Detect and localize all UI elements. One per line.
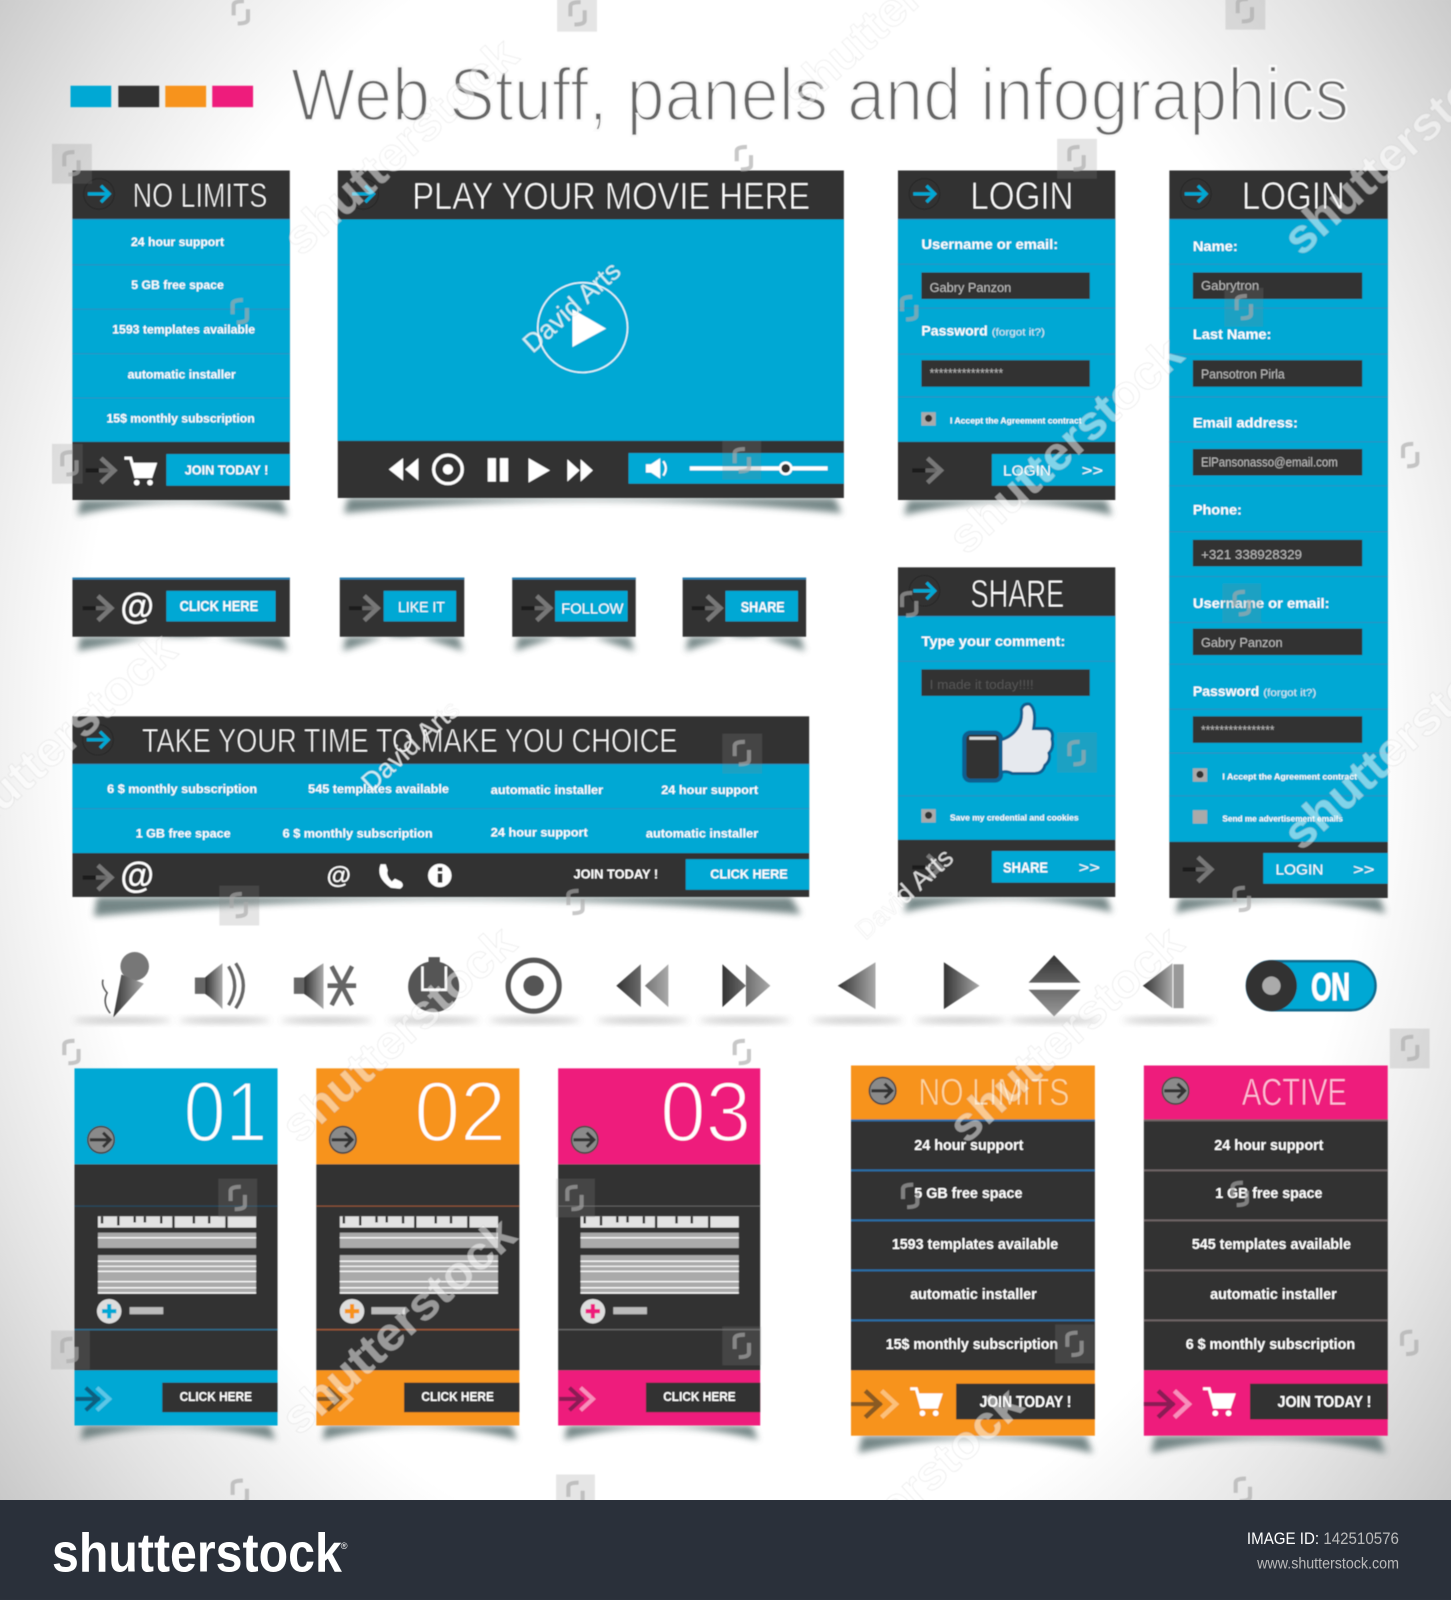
panel: take your time: 6 $ monthly subscription [283, 827, 433, 841]
panel: take your time: 1 GB free space [136, 827, 231, 841]
panel: orange no limits: 5 GB free space [914, 1186, 1022, 1202]
panel: share: I made it today!!!! [930, 677, 1034, 692]
footer bar: ® [341, 1541, 348, 1551]
icon: speaker [195, 963, 243, 1009]
icon row [73, 952, 1375, 1022]
panel: long login form: +321 338928329 [1201, 547, 1302, 562]
heading: NO LIMITS [133, 177, 267, 215]
panel: long login form: **************** [1201, 723, 1274, 738]
panel: long login form: Gabrytron [1201, 278, 1259, 293]
panel: take your time: 24 hour support [661, 783, 758, 797]
toggle: on [1246, 960, 1375, 1011]
panel: take your time: 6 $ monthly subscription [107, 782, 257, 796]
panel: no limits: 5 GB free space [131, 278, 224, 292]
watermarks: shutterstock [273, 27, 528, 265]
text placeholder [581, 1216, 739, 1294]
panel: long login form [1169, 170, 1388, 913]
button [956, 1384, 1095, 1419]
panel: long login form: (forgot it?) [1263, 688, 1316, 699]
panel: long login form: Phone: [1193, 502, 1242, 518]
button: click here: @ [120, 586, 154, 626]
panel: login: (forgot it?) [992, 328, 1045, 339]
button: CLICK HERE [421, 1389, 494, 1404]
text placeholder [340, 1216, 498, 1294]
watermarks: shutterstock [938, 915, 1194, 1152]
title block [70, 52, 1349, 136]
icon: fast forward [722, 964, 770, 1007]
button [162, 1383, 278, 1412]
panel: long login form: Password [1193, 684, 1259, 700]
heading: ACTIVE [1242, 1071, 1347, 1113]
panel: long login form: Email address: [1193, 416, 1298, 432]
panel: pink active: 6 $ monthly subscription [1186, 1337, 1355, 1353]
heading: TAKE YOUR TIME TO MAKE YOU CHOICE [142, 723, 678, 760]
text placeholder [98, 1216, 256, 1294]
icon: rewind [616, 964, 668, 1007]
button: follow [512, 578, 636, 651]
heading: SHARE [970, 573, 1064, 616]
arrow [317, 1388, 351, 1410]
watermarks: David Arts [355, 694, 465, 797]
panel: no limits: 1593 templates available [112, 323, 255, 337]
panel: long login form: Gabry Panzon [1201, 635, 1283, 650]
heading: LOGIN [970, 175, 1073, 218]
arrow [559, 1388, 593, 1410]
panel: video player [338, 170, 844, 513]
panel: login: Username or email: [921, 237, 1058, 253]
card: 01 [74, 1064, 278, 1440]
panel: take your time: 545 templates available [308, 782, 449, 796]
toggle: on: ON [1311, 966, 1350, 1009]
heading: PLAY YOUR MOVIE HERE [412, 175, 810, 217]
icon: thumbs up [964, 704, 1053, 781]
icon: next [944, 962, 980, 1009]
panel: pink active: automatic installer [1210, 1287, 1337, 1303]
panel: take your time: JOIN TODAY ! [573, 867, 658, 882]
button: CLICK HERE [180, 1389, 252, 1404]
panel: share [898, 567, 1115, 912]
watermarks: David Arts [517, 255, 626, 359]
panel: orange no limits: 24 hour support [914, 1138, 1024, 1154]
button [166, 454, 290, 486]
number: 02 [414, 1064, 506, 1160]
panel: orange no limits [851, 1065, 1095, 1453]
panel: login: Password [921, 324, 988, 340]
watermarks: shutterstock [938, 326, 1194, 564]
button [992, 851, 1115, 883]
button: click here: CLICK HERE [180, 599, 258, 615]
icon: plus [340, 1299, 364, 1323]
site url: www.shutterstock.com [1256, 1555, 1399, 1572]
panel: long login form: ElPansonasso@email.com [1201, 454, 1338, 469]
player controls [389, 455, 593, 484]
button: SHARE [1003, 860, 1048, 876]
button: click here [72, 578, 290, 651]
button [404, 1383, 519, 1412]
button: follow: FOLLOW [561, 601, 624, 617]
icon: back to start [1143, 963, 1184, 1008]
arrow [1144, 1391, 1189, 1417]
panel: orange no limits: 1593 templates available [892, 1237, 1058, 1253]
button: CLICK HERE [710, 867, 788, 882]
panel: long login form: I Accept the Agreement contract [1222, 773, 1357, 782]
card: 02 [316, 1064, 519, 1440]
button [992, 454, 1115, 486]
button: LOGIN [1275, 862, 1323, 878]
panel: long login form: Pansotron Pirla [1201, 367, 1285, 382]
arrow [76, 1388, 109, 1410]
icon shadows [73, 1018, 1214, 1022]
panel: login [898, 170, 1115, 515]
panel: take your time: automatic installer [491, 783, 603, 797]
button [1250, 1384, 1388, 1419]
panel: orange no limits: automatic installer [910, 1287, 1037, 1303]
footer logo: shutterstock [52, 1521, 342, 1583]
button: like it [340, 578, 464, 651]
panel: long login form: Username or email: [1193, 596, 1330, 612]
icon: up and down [1029, 955, 1081, 1016]
button: JOIN TODAY ! [185, 462, 268, 477]
panel: long login form: Send me advertisement emails [1222, 814, 1343, 823]
panel: login: Gabry Panzon [930, 280, 1011, 295]
icon: mute [294, 963, 356, 1009]
icon: power [408, 957, 459, 1012]
button: >> [1353, 862, 1374, 878]
card: 03 [558, 1064, 760, 1440]
icon: plus [581, 1299, 605, 1323]
heading: NO LIMITS [918, 1071, 1069, 1113]
arrow [851, 1391, 896, 1417]
panel: pink active [1144, 1065, 1388, 1453]
panel: login: I Accept the Agreement contract [950, 416, 1082, 425]
button: LOGIN [1003, 464, 1051, 480]
button: share [683, 578, 806, 651]
colour swatches [70, 86, 253, 107]
panel: pink active: 1 GB free space [1215, 1186, 1322, 1202]
footer bar [0, 1500, 1451, 1600]
watermarks: shutterstock [271, 1207, 526, 1444]
button: >> [1082, 464, 1103, 480]
button: share: SHARE [741, 600, 785, 616]
button [1263, 853, 1388, 884]
panel: pink active: 24 hour support [1214, 1138, 1324, 1154]
panel: take your time [72, 716, 809, 916]
title: Web Stuff, panels and infographics [291, 52, 1349, 136]
panel: take your time: 24 hour support [491, 826, 588, 840]
panel: long login form: Name: [1193, 239, 1238, 255]
icon: plus [97, 1299, 121, 1323]
button: like it: LIKE IT [398, 600, 445, 616]
button [686, 859, 809, 890]
button: >> [1079, 860, 1100, 876]
button: JOIN TODAY ! [980, 1394, 1071, 1411]
panel: no limits: automatic installer [128, 368, 236, 382]
icon: play [538, 283, 628, 372]
panel: pink active: 545 templates available [1192, 1237, 1351, 1253]
contact icons: @ [327, 863, 351, 890]
button: JOIN TODAY ! [1278, 1394, 1371, 1411]
watermarks: David Arts [849, 842, 959, 945]
panel: share: Type your comment: [921, 634, 1065, 650]
button: CLICK HERE [663, 1389, 736, 1404]
number: 03 [660, 1064, 751, 1160]
panel: orange no limits: 15$ monthly subscription [886, 1337, 1058, 1353]
panel: long login form: Last Name: [1193, 327, 1271, 343]
panel: no limits [72, 170, 290, 515]
contact icons [327, 863, 452, 890]
panel: take your time: automatic installer [646, 827, 758, 841]
image id: IMAGE ID: 142510576 [1247, 1530, 1399, 1548]
panel: no limits: 24 hour support [131, 235, 224, 249]
panel: login: **************** [930, 366, 1003, 381]
button [646, 1383, 760, 1412]
icon: record [508, 960, 559, 1011]
heading: LOGIN [1242, 175, 1345, 218]
volume bar [629, 453, 844, 484]
watermarks: shutterstock [271, 915, 526, 1152]
panel: no limits: 15$ monthly subscription [107, 411, 255, 425]
panel: take your time: @ [120, 856, 154, 896]
icon: microphone [103, 952, 149, 1017]
icon: previous [838, 962, 875, 1009]
number: 01 [184, 1064, 267, 1160]
panel: share: Save my credential and cookies [950, 813, 1079, 822]
